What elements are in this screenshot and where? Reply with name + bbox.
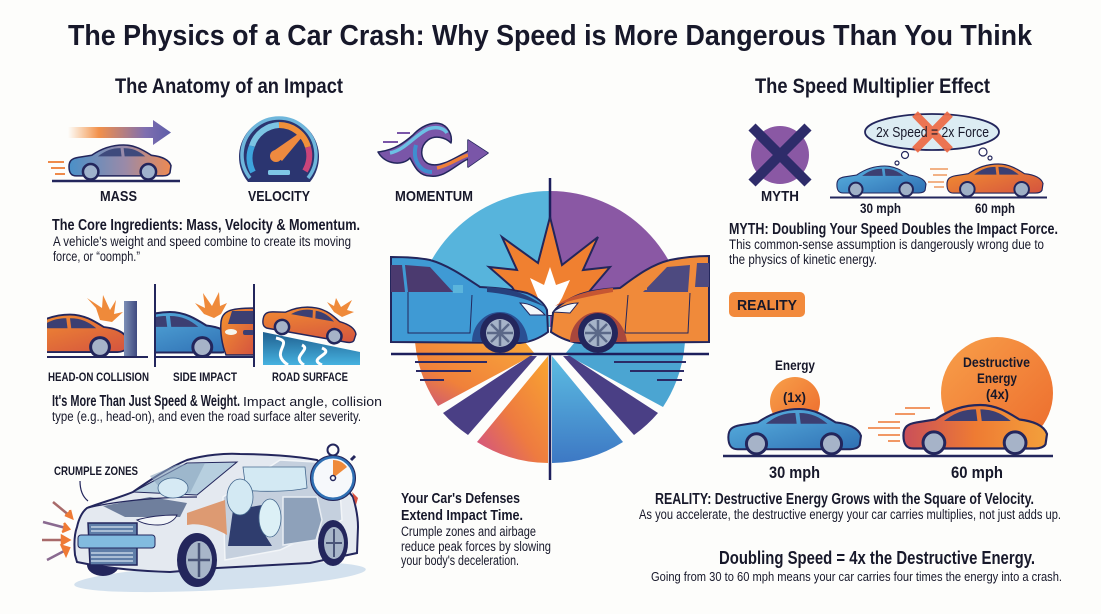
icon: momentum wave [378, 123, 488, 176]
panel: central collision graphic [391, 178, 709, 480]
energy comparison: 4x circle: Energy [977, 370, 1017, 386]
panel: speed multiplier effect [639, 75, 1062, 584]
labels: impact types: ROAD SURFACE [272, 372, 348, 384]
circle backdrop [414, 191, 686, 463]
icon: myth cross [751, 126, 809, 184]
energy comparison: 4x circle: Destructive [963, 354, 1030, 370]
label: mass: MASS [100, 188, 137, 205]
icon: side impact [156, 292, 253, 358]
icon: mass car with arrow [48, 120, 180, 181]
energy comparison: 4x circle [941, 337, 1053, 449]
text block: myth [729, 221, 1058, 267]
text block: defenses: Your Car's Defenses [401, 490, 520, 507]
label: crumple zones: CRUMPLE ZONES [54, 466, 138, 478]
text block: core ingredients: force, or “oomph.” [53, 249, 140, 264]
label: momentum: MOMENTUM [395, 188, 473, 205]
text block: defenses: Crumple zones and airbage [401, 524, 536, 539]
energy comparison: 1x circle: (1x) [783, 389, 806, 405]
panel: anatomy of an impact [4, 75, 488, 598]
text block: conclusion: Doubling Speed = 4x the Destructive Energy. [719, 548, 1035, 568]
icon: stopwatch [310, 444, 356, 500]
heading: speed multiplier: The Speed Multiplier Effect [755, 75, 990, 98]
text block: myth: the physics of kinetic energy. [729, 252, 877, 267]
labels: reality speeds [769, 463, 1003, 482]
labels: myth speeds [860, 200, 1015, 216]
orange car [551, 256, 709, 353]
text block: more than speed and weight: type (e.g., head-on), and even the road surface alter severity. [52, 409, 361, 424]
title: The Physics of a Car Crash: Why Speed is More Dangerous Than You Think [68, 20, 1033, 52]
text block: reality [639, 491, 1061, 522]
road line [391, 353, 709, 355]
divider line left [154, 284, 156, 367]
labels: impact types: HEAD-ON COLLISION [48, 372, 149, 384]
text block: conclusion [651, 548, 1062, 584]
energy comparison: 4x circle: (4x) [986, 386, 1009, 402]
energy comparison: 1x circle [770, 357, 820, 427]
cars: reality comparison [723, 405, 1053, 456]
illustration: transparent car with airbags [74, 454, 366, 598]
icon: head-on collision [47, 295, 148, 358]
badge: reality: REALITY [737, 297, 797, 314]
thought bubble [865, 114, 999, 165]
text block: more than speed and weight [52, 393, 382, 424]
speed lines [415, 362, 686, 380]
text block: defenses: reduce peak forces by slowing [401, 539, 551, 554]
text block: core ingredients: The Core Ingredients: Mass, Velocity & Momentum. [52, 217, 360, 234]
labels: impact types [48, 372, 348, 384]
thought bubble: 2x Speed = 2x Force [876, 124, 989, 141]
label: velocity: VELOCITY [248, 188, 310, 205]
centre axis [549, 178, 551, 480]
labels: reality speeds: 60 mph [951, 463, 1003, 482]
divider line right [253, 284, 255, 367]
label: crumple zones [54, 466, 138, 501]
badge: reality [729, 292, 805, 317]
energy comparison: 1x circle: Energy [775, 357, 815, 373]
text block: myth: This common-sense assumption is dangerously wrong due to [729, 237, 1044, 252]
explosion burst [489, 217, 610, 315]
text block: defenses: your body's deceleration. [401, 553, 519, 568]
text block: defenses: Extend Impact Time. [401, 507, 523, 524]
icon: impact arrows [42, 502, 72, 560]
icon: road surface [261, 298, 360, 365]
labels: myth speeds: 60 mph [975, 200, 1015, 216]
text block: core ingredients [52, 217, 360, 264]
cars: myth comparison [830, 164, 1047, 198]
labels: reality speeds: 30 mph [769, 463, 820, 482]
labels: impact types: SIDE IMPACT [173, 372, 237, 384]
blue car [391, 257, 548, 353]
text block: core ingredients: A vehicle's weight and speed combine to create its moving [53, 234, 351, 249]
text block: more than speed and weight: Impact angle, collision [243, 394, 382, 409]
labels: myth speeds: 30 mph [860, 200, 901, 216]
icon: speedometer [239, 117, 319, 182]
heading: anatomy: The Anatomy of an Impact [115, 75, 343, 98]
label: myth: MYTH [761, 188, 799, 205]
text block: more than speed and weight: It's More Than Just Speed & Weight. [52, 393, 240, 410]
text block: defenses [401, 490, 551, 568]
